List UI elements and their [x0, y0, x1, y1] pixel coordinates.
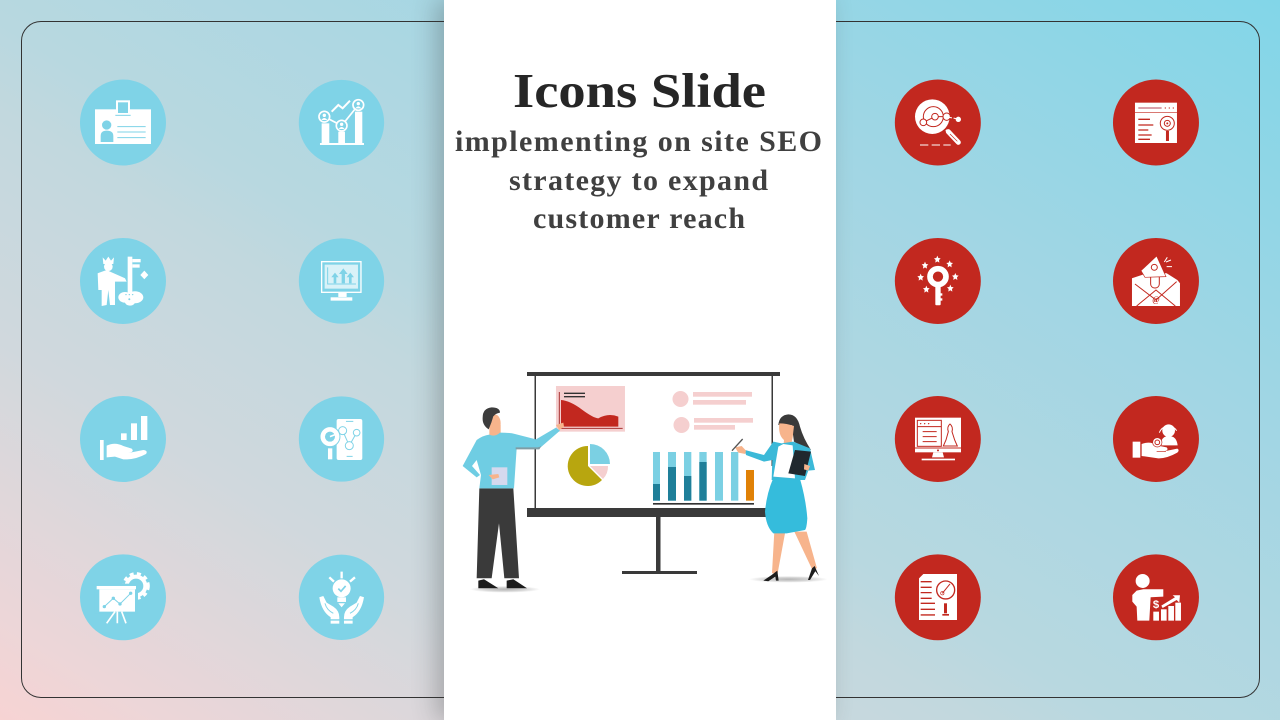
pie chart [568, 444, 610, 486]
icon: webpage with magnifier [1113, 79, 1199, 165]
icon: envelope with megaphone [1113, 238, 1199, 324]
icon: key with stars [895, 238, 981, 324]
icon: document with gauge [895, 554, 981, 640]
legend rows [672, 391, 753, 433]
subtitle: strategy to expand [509, 164, 768, 197]
icon: person with key [80, 238, 166, 324]
icon: presentation with gear [80, 554, 166, 640]
icon: id badge [80, 79, 166, 165]
title: Icons Slide [513, 63, 766, 118]
icon: hand with support agent [1113, 396, 1199, 482]
icon: hands holding bulb [299, 555, 384, 640]
icon: hand with growth bars [80, 396, 166, 482]
area chart [556, 386, 625, 432]
icon: envelope with megaphone: @ [1152, 295, 1160, 304]
subtitle: implementing on site SEO [455, 125, 822, 158]
icon: phone with magnifier [299, 396, 384, 482]
presenter: man [463, 407, 564, 593]
icon: monitor with chess piece [895, 396, 981, 482]
presenter: woman [732, 414, 828, 583]
icon: people bar chart [299, 80, 384, 165]
icon: person with revenue bars [1113, 554, 1199, 640]
illustration: presentation scene [463, 372, 828, 593]
icon: search analysis [895, 79, 981, 165]
bar chart [653, 452, 754, 505]
presentation board [527, 372, 780, 574]
subtitle: customer reach [533, 202, 745, 235]
icon: monitor with arrows [299, 238, 384, 324]
subtitle [455, 125, 822, 235]
icon: person with revenue bars: $ [1153, 599, 1160, 611]
panel: central white column [444, 0, 836, 720]
